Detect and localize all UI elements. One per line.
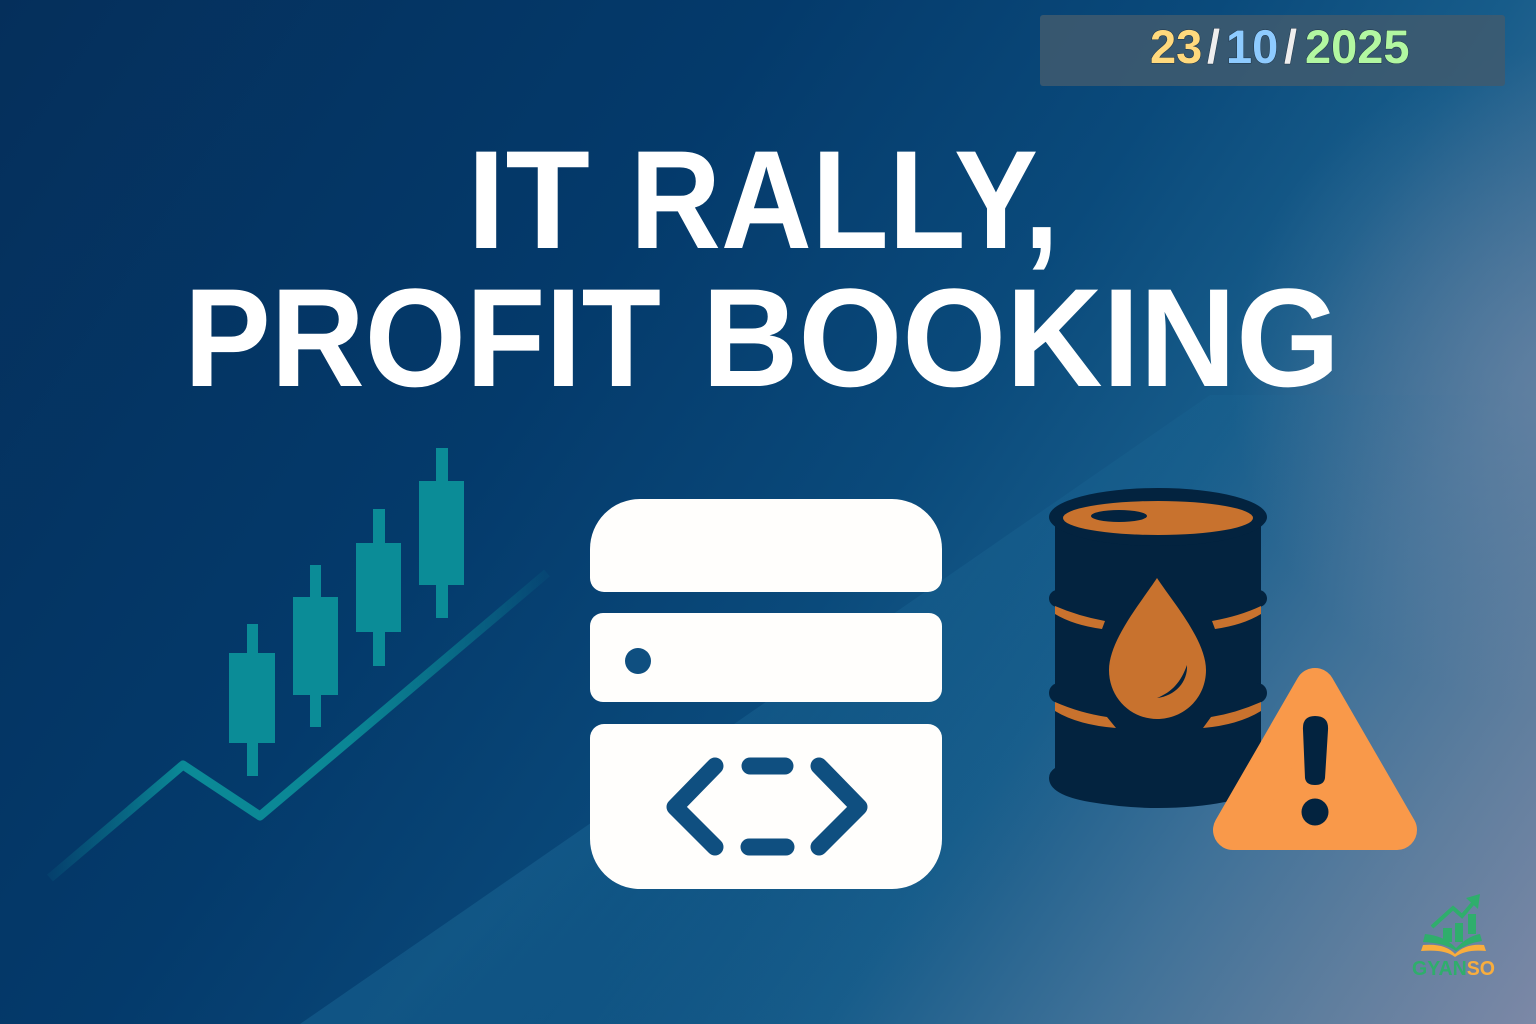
title: RALLY, [630,121,1059,278]
candlesticks [229,448,464,776]
date text: 23 [1150,20,1202,73]
date text: 2025 [1305,20,1410,73]
icon: oil barrel [1049,488,1268,808]
logo wordmark: GYANSO [1412,958,1495,980]
logo book [1423,934,1482,951]
barrel bands [1055,606,1261,728]
oil drop [1109,578,1206,719]
trend line [50,573,547,878]
barrel lid [1063,501,1253,535]
date badge [1040,15,1505,86]
server bottom tier with code symbol [590,724,942,889]
icon: server stack with code [590,499,942,889]
date text: / [1207,20,1220,73]
title: BOOKING [702,259,1340,416]
logo arrow [1432,902,1474,927]
server middle tier [590,613,942,702]
title: PROFIT [184,259,661,416]
date text: 10 [1226,20,1278,73]
logo: Gyanso [1412,894,1495,980]
date text: / [1284,20,1297,73]
icon: warning triangle [1233,688,1397,830]
server top tier [590,499,942,592]
title [184,121,1340,416]
title: IT [467,121,590,278]
logo bars [1443,914,1476,942]
trend line and candlesticks chart [50,448,547,878]
